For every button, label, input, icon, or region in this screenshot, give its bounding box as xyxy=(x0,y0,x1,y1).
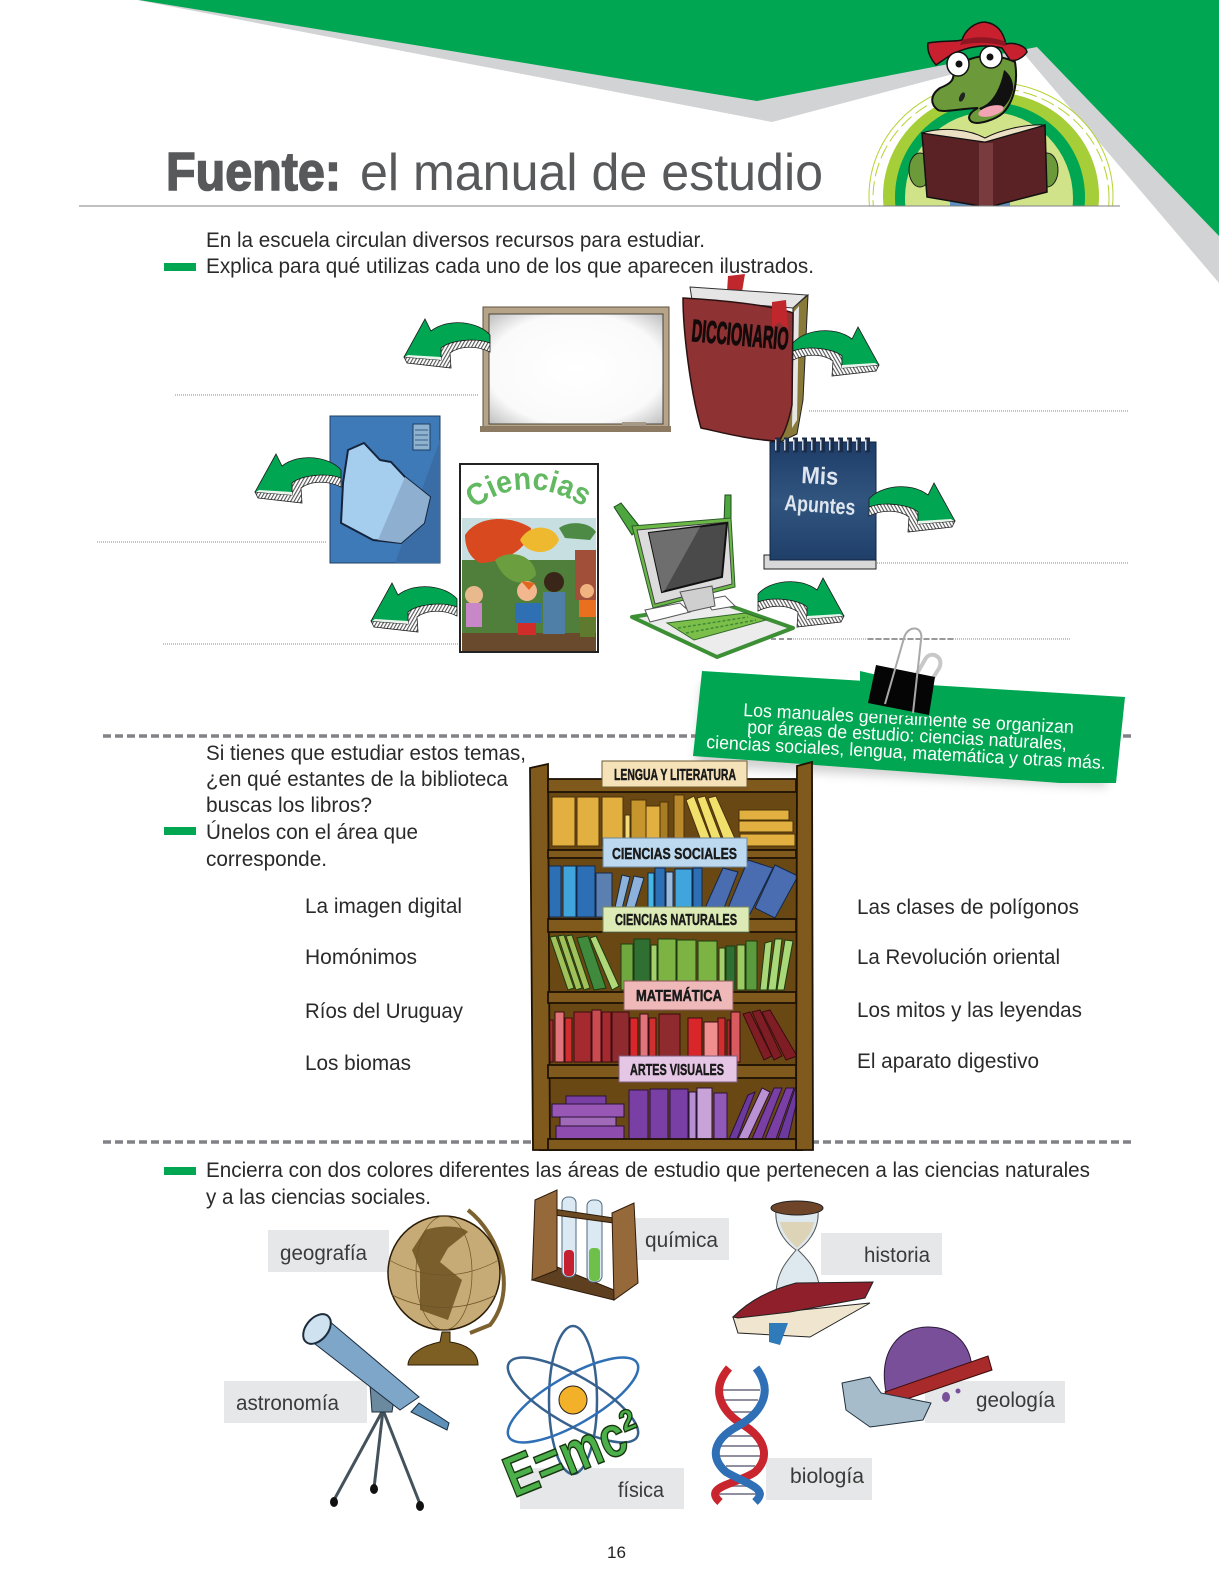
arrow: blackboard xyxy=(404,319,490,368)
bookcase xyxy=(530,761,813,1150)
green books xyxy=(550,935,793,990)
right topic list: Las clases de polígonos xyxy=(857,896,1079,919)
left topic list: Ríos del Uruguay xyxy=(305,1000,463,1023)
callout note with binder clip: por áreas de estudio: ciencias naturales, xyxy=(747,716,1067,754)
right topic list xyxy=(857,896,1082,1073)
notebook: Apuntes xyxy=(784,490,856,520)
purple books xyxy=(552,1086,799,1139)
tag: historia: historia xyxy=(864,1243,930,1267)
laptop xyxy=(614,495,793,657)
blue books xyxy=(547,860,798,918)
activity 1 instructions xyxy=(164,229,814,278)
arrow: map xyxy=(255,454,341,503)
notebook: Mis xyxy=(801,462,839,491)
activity 3 instructions xyxy=(164,1159,1090,1209)
icon: binder clip xyxy=(868,628,940,715)
tag: geografía: geografía xyxy=(280,1241,367,1265)
map of Uruguay xyxy=(330,416,440,563)
activity 2 instructions: Si tienes que estudiar estos temas, xyxy=(206,742,526,765)
science textbook xyxy=(459,463,599,653)
left topic list: La imagen digital xyxy=(305,895,462,918)
tag: geología: geología xyxy=(976,1388,1055,1412)
icon: hourglass and book xyxy=(733,1201,873,1345)
icon: atom and formula xyxy=(495,1326,651,1510)
icon: test tube rack xyxy=(532,1190,638,1300)
callout note with binder clip xyxy=(693,628,1125,787)
shelf label: Matemática: MATEMÁTICA xyxy=(636,986,722,1005)
notebook xyxy=(764,442,876,569)
left topic list: Homónimos xyxy=(305,946,417,969)
header banner xyxy=(137,0,1219,283)
tag: biología: biología xyxy=(790,1464,864,1488)
red books xyxy=(547,1010,797,1062)
page number: 16 xyxy=(607,1543,626,1562)
icon: DNA helix xyxy=(715,1368,766,1502)
tag: física xyxy=(520,1468,684,1509)
arrow: textbook xyxy=(371,583,457,632)
shelf label: Lengua y Literatura: LENGUA Y LITERATURA xyxy=(614,767,736,784)
mascot: crocodile reading a book xyxy=(868,21,1114,206)
tag: astronomía xyxy=(224,1381,367,1423)
bookcase frame xyxy=(530,762,813,1150)
activity 2 instructions xyxy=(164,742,526,871)
callout note with binder clip: Los manuales generalmente se organizan xyxy=(743,699,1074,737)
tag: astronomía: astronomía xyxy=(236,1391,339,1415)
icon: atom and formula: E=mc² xyxy=(495,1397,651,1510)
shelf label: Artes Visuales xyxy=(619,1056,737,1082)
callout note with binder clip: ciencias sociales, lengua, matemática y otras más. xyxy=(706,731,1106,773)
activity 2 instructions: ¿en qué estantes de la biblioteca xyxy=(206,768,508,791)
tag: biología xyxy=(766,1458,872,1500)
blackboard xyxy=(480,307,671,432)
section divider xyxy=(103,734,1134,738)
shelf label: Ciencias Naturales xyxy=(603,907,749,932)
shelf label: Ciencias Sociales xyxy=(603,838,747,867)
activity 2 instructions: Únelos con el área que xyxy=(206,821,418,844)
shelf label: Matemática xyxy=(624,981,733,1010)
title: Fuente: xyxy=(166,142,341,202)
icon: mineral and tool xyxy=(842,1327,992,1427)
tag: historia xyxy=(821,1233,942,1275)
activity 1 instructions: En la escuela circulan diversos recursos para estudiar. xyxy=(206,229,705,252)
dictionary xyxy=(683,274,808,442)
activity 2 instructions: buscas los libros? xyxy=(206,794,372,817)
activity 1 instructions: Explica para qué utilizas cada uno de los que aparecen ilustrados. xyxy=(206,255,814,278)
right topic list: La Revolución oriental xyxy=(857,946,1060,969)
right topic list: Los mitos y las leyendas xyxy=(857,999,1082,1022)
left topic list: Los biomas xyxy=(305,1052,411,1075)
yellow books xyxy=(552,795,795,846)
activity 3 instructions: Encierra con dos colores diferentes las áreas de estudio que pertenecen a las ciencias naturales xyxy=(206,1159,1090,1182)
arrow: laptop xyxy=(758,578,844,627)
tag: física: física xyxy=(618,1478,664,1502)
science textbook: Ciencias xyxy=(466,470,589,505)
dictionary: DICCIONARIO xyxy=(690,313,790,356)
right topic list: El aparato digestivo xyxy=(857,1050,1039,1073)
icon: telescope xyxy=(298,1309,449,1511)
activity 3 instructions: y a las ciencias sociales. xyxy=(206,1186,431,1209)
left topic list xyxy=(305,895,463,1075)
tag: geografía xyxy=(268,1230,389,1272)
tag: geología xyxy=(925,1381,1065,1423)
activity 2 instructions: corresponde. xyxy=(206,848,327,871)
section divider xyxy=(103,1140,1132,1144)
shelf label: Lengua y Literatura xyxy=(602,761,747,787)
shelf label: Ciencias Naturales: CIENCIAS NATURALES xyxy=(615,912,737,929)
answer lines xyxy=(97,395,1129,644)
shelf label: Ciencias Sociales: CIENCIAS SOCIALES xyxy=(612,846,737,863)
icon: globe xyxy=(388,1210,504,1365)
tag: química xyxy=(634,1218,729,1260)
arrow: dictionary xyxy=(793,327,879,376)
title: el manual de estudio xyxy=(360,144,823,202)
arrow: notebook xyxy=(869,483,955,532)
title xyxy=(166,142,823,202)
shelf label: Artes Visuales: ARTES VISUALES xyxy=(630,1062,724,1079)
tag: química: química xyxy=(645,1228,718,1252)
